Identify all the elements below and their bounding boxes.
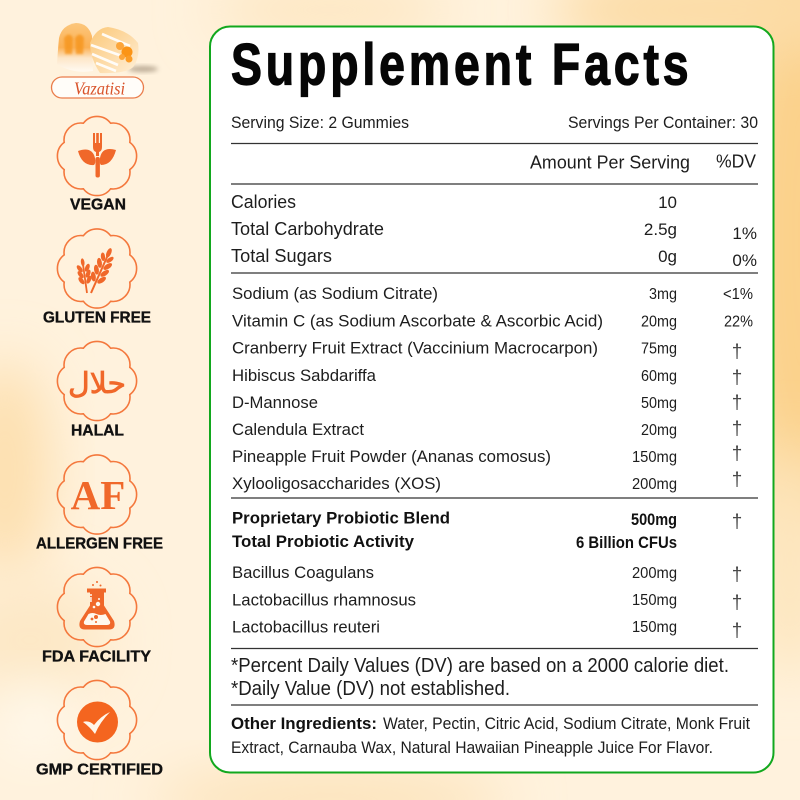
row: xos: † [732, 470, 742, 490]
row: sodium: <1% [723, 286, 753, 303]
row: vitamin c: Vitamin C (as Sodium Ascorbate & Ascorbic Acid) [232, 312, 603, 330]
row: rhamnosus: † [732, 592, 742, 614]
row: d-mannose: † [732, 392, 742, 414]
row: proprietary blend: Proprietary Probiotic Blend [232, 510, 450, 528]
row: proprietary blend: 500mg [631, 511, 677, 529]
row: total sugars [231, 246, 757, 270]
row: total probiotic: Total Probiotic Activity [232, 533, 415, 551]
row: reuteri: † [732, 620, 742, 642]
footnotes: *Percent Daily Values (DV) are based on a 2000 calorie diet. [231, 654, 729, 677]
icon: flask [79, 581, 115, 630]
row: bacillus [232, 564, 742, 586]
row: sodium [232, 285, 753, 303]
row: xos: Xylooligosaccharides (XOS) [232, 475, 441, 493]
row: calendula: Calendula Extract [232, 421, 364, 439]
row: vitamin c: 20mg [641, 314, 677, 330]
row: pineapple [232, 444, 742, 466]
row: total carbohydrate: 1% [732, 224, 757, 243]
product image: gummies [57, 23, 158, 73]
row: bacillus: Bacillus Coagulans [232, 564, 374, 582]
icon: halal arabic: حلال [68, 366, 126, 400]
icon: check circle [77, 702, 118, 742]
icon: fork and leaves [78, 133, 116, 178]
row: total sugars: 0% [732, 251, 757, 270]
column header [530, 152, 756, 172]
other ingredients: Extract, Carnauba Wax, Natural Hawaiian Pineapple Juice For Flavor. [231, 738, 713, 757]
row: hibiscus: † [732, 368, 742, 388]
label: gmp certified: GMP CERTIFIED [36, 762, 163, 778]
row: calendula: † [732, 418, 742, 440]
other ingredients: Other Ingredients: [231, 714, 377, 733]
row: bacillus: † [732, 564, 742, 586]
row: d-mannose: 50mg [641, 395, 677, 412]
row: calendula: 20mg [641, 422, 677, 439]
serving info: Servings Per Container: 30 [568, 113, 758, 132]
row: pineapple: Pineapple Fruit Powder (Ananas comosus) [232, 448, 551, 466]
row: hibiscus [232, 367, 742, 388]
serving info [231, 113, 758, 132]
row: hibiscus: 60mg [641, 368, 677, 385]
row: reuteri: Lactobacillus reuteri [232, 618, 380, 636]
row: total sugars: Total Sugars [231, 246, 332, 266]
column header: Amount Per Serving [530, 152, 690, 172]
label: fda facility: FDA FACILITY [42, 648, 152, 666]
row: sodium: 3mg [649, 286, 677, 303]
footnotes [231, 654, 729, 700]
label: gluten free: GLUTEN FREE [43, 310, 151, 326]
badge: fda facility [57, 567, 137, 647]
badge: allergen free [57, 455, 137, 534]
badge: gluten free [57, 229, 137, 308]
row: pineapple: † [732, 444, 742, 464]
icon: AF: AF [71, 472, 125, 518]
row: sodium: Sodium (as Sodium Citrate) [232, 285, 438, 303]
brand logo pill: Vazatisi [74, 78, 125, 98]
label: allergen free: ALLERGEN FREE [36, 536, 163, 552]
row: total carbohydrate: 2.5g [644, 220, 677, 239]
row: d-mannose: D-Mannose [232, 394, 318, 412]
row: calories: 10 [658, 193, 677, 212]
badge: gmp certified [57, 680, 137, 760]
row: total probiotic [232, 533, 677, 552]
icon: wheat [74, 245, 119, 297]
row: cranberry: 75mg [641, 340, 677, 358]
other ingredients: Water, Pectin, Citric Acid, Sodium Citrate, Monk Fruit [383, 714, 750, 733]
row: d-mannose [232, 392, 742, 414]
row: total sugars: 0g [658, 247, 677, 266]
row: bacillus: 200mg [632, 565, 677, 582]
row: pineapple: 150mg [632, 449, 677, 466]
label: halal: HALAL [71, 422, 124, 440]
panel: supplement facts [210, 26, 774, 772]
serving info: Serving Size: 2 Gummies [231, 113, 409, 132]
row: total probiotic: 6 Billion CFUs [576, 534, 677, 552]
row: calories [231, 192, 677, 212]
row: xos [232, 470, 742, 493]
row: rhamnosus: 150mg [632, 592, 677, 609]
other ingredients [231, 714, 750, 757]
row: calendula [232, 418, 742, 440]
label: vegan: VEGAN [70, 196, 126, 214]
row: reuteri: 150mg [632, 619, 677, 636]
row: xos: 200mg [632, 476, 677, 493]
row: cranberry [232, 340, 742, 362]
row: cranberry: † [732, 342, 742, 362]
row: total carbohydrate: Total Carbohydrate [231, 219, 384, 239]
row: proprietary blend [232, 510, 742, 532]
row: calories: Calories [231, 192, 296, 212]
row: total carbohydrate [231, 219, 757, 243]
row: reuteri [232, 618, 742, 642]
column header: %DV [716, 152, 756, 172]
brand logo pill [52, 77, 144, 98]
badge: halal [57, 341, 137, 421]
row: rhamnosus: Lactobacillus rhamnosus [232, 592, 416, 610]
row: proprietary blend: † [732, 512, 742, 532]
row: vitamin c: 22% [724, 314, 753, 330]
title: Supplement Facts [231, 33, 689, 98]
footnotes: *Daily Value (DV) not established. [231, 677, 510, 700]
row: cranberry: Cranberry Fruit Extract (Vaccinium Macrocarpon) [232, 340, 598, 358]
row: vitamin c [232, 312, 753, 330]
row: hibiscus: Hibiscus Sabdariffa [232, 367, 377, 385]
row: rhamnosus [232, 592, 742, 614]
badge: vegan [57, 116, 137, 196]
